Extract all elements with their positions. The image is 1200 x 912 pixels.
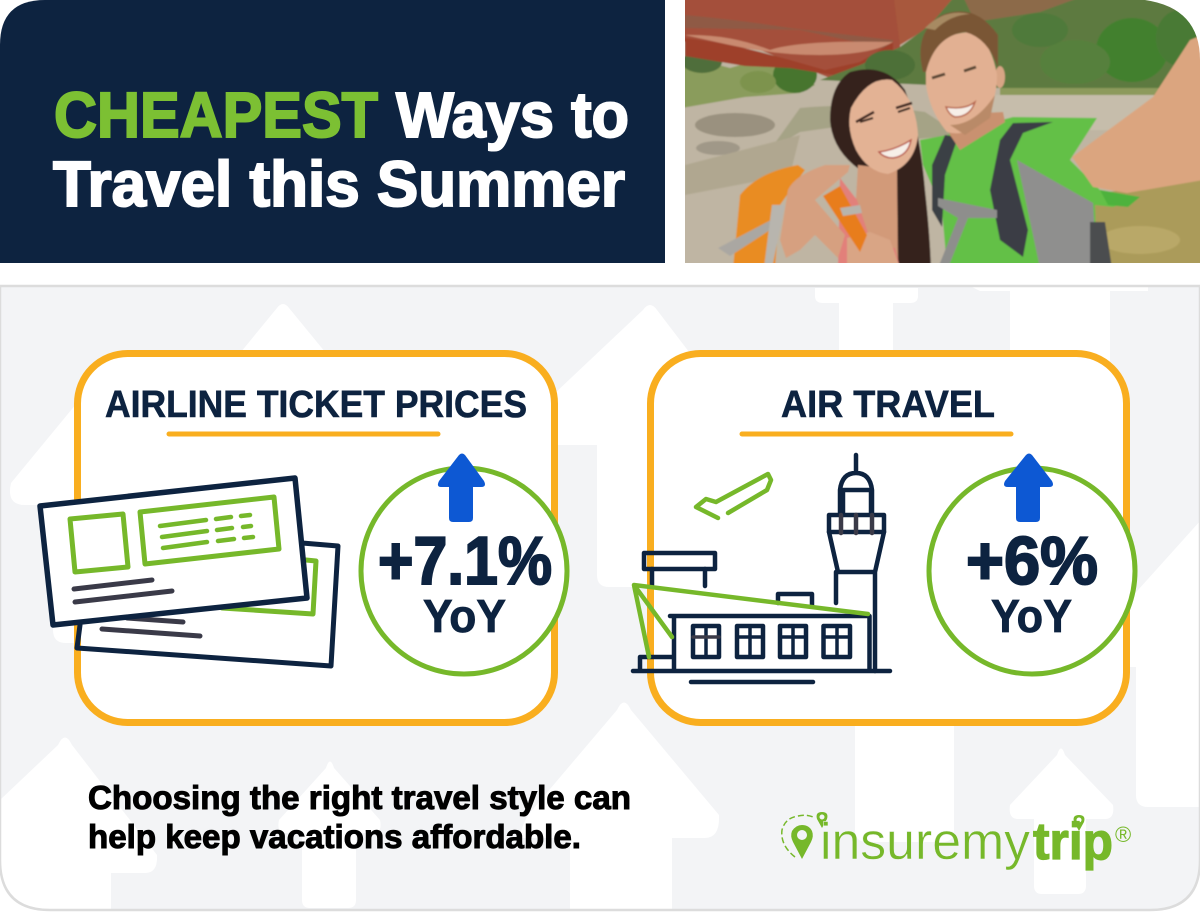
wordmark: insuremy xyxy=(820,813,1030,871)
orange backpack xyxy=(733,165,805,268)
photo: couple taking a selfie in a canyon xyxy=(670,0,1200,275)
registered mark: ® xyxy=(1115,822,1131,847)
closing text: Choosing the right travel style can xyxy=(88,779,631,816)
icon: green roof xyxy=(634,585,868,657)
icon: terminal building xyxy=(633,553,890,682)
woman's hair xyxy=(830,69,931,268)
woman's neck xyxy=(856,164,900,260)
green bushes left xyxy=(685,64,815,108)
icon: route dashes xyxy=(782,815,813,857)
panel: airline ticket prices xyxy=(40,354,567,722)
icon: control tower xyxy=(829,455,884,671)
man's neck xyxy=(947,112,1005,150)
title: Travel this Summer xyxy=(53,148,625,220)
icon: airline tickets xyxy=(40,478,338,666)
man's shirt xyxy=(919,116,1116,263)
stat circle xyxy=(361,454,567,674)
background arrow: right edge xyxy=(1130,523,1198,807)
background arrow: centre top xyxy=(557,305,688,587)
orange strap xyxy=(823,186,867,252)
title: CHEAPEST xyxy=(54,79,378,151)
man's arm around woman xyxy=(780,165,850,258)
man's hair xyxy=(920,11,998,72)
panel border xyxy=(0,286,1200,910)
icon: pin on the i of trip xyxy=(1074,815,1084,831)
value: +6% xyxy=(966,523,1098,599)
red cliffs xyxy=(670,0,900,78)
label: YoY xyxy=(423,590,506,642)
label: YoY xyxy=(991,590,1072,642)
closing text xyxy=(88,779,631,855)
woman's face xyxy=(849,80,918,174)
logo: insuremytrip xyxy=(782,812,1131,871)
background arrow: bottom left xyxy=(0,738,157,912)
man's backpack xyxy=(1017,160,1097,268)
background arrow: left xyxy=(10,407,74,643)
divider xyxy=(169,432,438,436)
riverbed xyxy=(685,36,1115,263)
heading: AIR TRAVEL xyxy=(781,384,995,426)
man's ear xyxy=(995,66,1005,88)
man's outstretched arm xyxy=(1072,30,1200,193)
icon: plane xyxy=(696,474,771,518)
background panel with white arrows xyxy=(0,286,1200,912)
title: Ways to xyxy=(396,79,629,151)
icon: up arrow xyxy=(1004,454,1053,522)
logo: insuremytrip: trip xyxy=(1033,813,1113,871)
background arrow: bottom second xyxy=(278,762,381,908)
background arrow: column top right xyxy=(974,288,1148,362)
divider xyxy=(742,432,1011,436)
green hillside xyxy=(820,0,1200,88)
stat circle xyxy=(929,454,1135,674)
title xyxy=(53,79,629,220)
panel: air travel xyxy=(633,354,1135,722)
title banner xyxy=(0,0,665,263)
value: +7.1% xyxy=(378,523,552,599)
woman's top xyxy=(838,178,900,268)
background arrow: bottom right xyxy=(1010,748,1113,894)
background column: lower xyxy=(855,726,954,842)
closing text: help keep vacations affordable. xyxy=(88,818,581,855)
water xyxy=(1094,180,1200,263)
icon: airport with control tower and plane xyxy=(633,455,890,682)
background arrow: column top centre xyxy=(815,288,918,350)
heading: AIRLINE TICKET PRICES xyxy=(105,384,527,426)
rocks xyxy=(695,113,775,137)
woman's hand xyxy=(846,232,899,263)
icon: up arrow xyxy=(438,454,485,522)
icon: large map pin xyxy=(791,825,813,859)
icon: small map pin xyxy=(817,812,827,828)
man's face xyxy=(926,32,997,133)
background arrow: second xyxy=(243,304,323,350)
background arrow: bottom centre xyxy=(520,702,719,912)
